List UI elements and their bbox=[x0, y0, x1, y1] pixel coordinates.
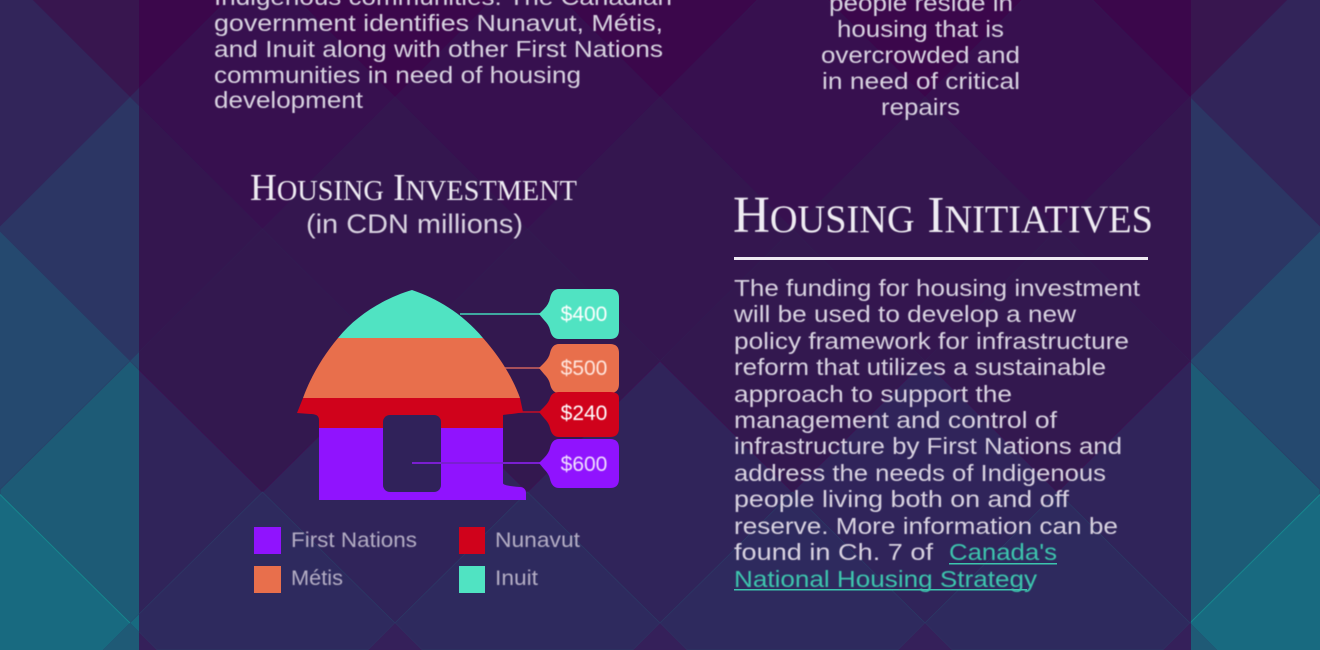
house: Métis roof band bbox=[303, 338, 520, 398]
house: Nunavut roof band bbox=[297, 398, 523, 428]
link: Canada's National Housing Strategy: Canada's bbox=[949, 539, 1057, 565]
tag: Nunavut $240 bbox=[539, 392, 619, 437]
text block: Housing Initiatives description: reserve. More information can be bbox=[734, 513, 1118, 539]
text block: overcrowded housing statistic: housing that is bbox=[837, 16, 1004, 42]
heading: Housing Investment: HOUSING INVESTMENT bbox=[250, 167, 577, 209]
text block: Indigenous housing need: communities in need of housing bbox=[214, 62, 581, 88]
tag: Inuit $400: $400 bbox=[561, 303, 607, 326]
tag: Métis $500 bbox=[539, 344, 619, 393]
house: Inuit roof band bbox=[338, 290, 483, 338]
text block: overcrowded housing statistic: overcrowded and bbox=[821, 42, 1020, 68]
text block: Indigenous housing need bbox=[214, 0, 672, 113]
house: First Nations walls bbox=[319, 428, 526, 500]
tag: Inuit $400 bbox=[539, 289, 619, 339]
text block: Housing Initiatives description: policy framework for infrastructure bbox=[734, 328, 1129, 354]
link: Canada's National Housing Strategy bbox=[734, 539, 1057, 592]
heading: Housing Investment: (in CDN millions) bbox=[306, 209, 523, 239]
tag: First Nations $600 bbox=[539, 439, 619, 488]
text block: Housing Initiatives description bbox=[733, 275, 1141, 592]
legend item: Nunavut bbox=[459, 527, 580, 554]
legend bbox=[254, 527, 580, 593]
text block: Housing Initiatives description: found in Ch. 7 of bbox=[734, 539, 934, 565]
house door bbox=[383, 415, 441, 492]
chart: house-shaped investment breakdown bbox=[297, 289, 619, 500]
text block: Housing Initiatives description: will be used to develop a new bbox=[733, 301, 1076, 327]
tag: Métis $500: $500 bbox=[561, 357, 607, 380]
text block: Housing Initiatives description: address the needs of Indigenous bbox=[734, 460, 1106, 486]
legend item: Inuit: Inuit bbox=[495, 567, 538, 590]
connector: Métis bbox=[505, 367, 542, 369]
text block: Housing Initiatives description: infrastructure by First Nations and bbox=[734, 433, 1122, 459]
connector: First Nations bbox=[412, 462, 542, 464]
legend item: Nunavut: Nunavut bbox=[495, 529, 580, 552]
heading: Housing Initiatives: HOUSING INITIATIVES bbox=[733, 187, 1153, 244]
text block: Housing Initiatives description: reform that utilizes a sustainable bbox=[734, 354, 1106, 380]
text block: Indigenous housing need: development bbox=[214, 87, 364, 113]
legend item: Métis bbox=[254, 566, 343, 593]
text block: overcrowded housing statistic bbox=[821, 0, 1020, 120]
text block: Indigenous housing need: government identifies Nunavut, Métis, bbox=[214, 10, 663, 36]
legend item: Métis: Métis bbox=[291, 567, 343, 590]
text block: Housing Initiatives description: The funding for housing investment bbox=[734, 275, 1141, 301]
text block: overcrowded housing statistic: repairs bbox=[881, 94, 960, 120]
text block: Housing Initiatives description: people living both on and off bbox=[734, 486, 1070, 512]
legend item: First Nations bbox=[254, 527, 417, 554]
text block: Indigenous housing need: and Inuit along with other First Nations bbox=[214, 36, 663, 62]
link: Canada's National Housing Strategy: National Housing Strategy bbox=[734, 566, 1038, 592]
text block: Housing Initiatives description: approach to support the bbox=[734, 381, 1012, 407]
tag: Nunavut $240: $240 bbox=[561, 402, 607, 425]
legend item: Inuit bbox=[459, 566, 538, 593]
legend item: First Nations: First Nations bbox=[291, 529, 417, 552]
connector: Inuit bbox=[460, 313, 542, 315]
text block: Housing Initiatives description: management and control of bbox=[734, 407, 1058, 433]
tag: First Nations $600: $600 bbox=[561, 453, 607, 476]
connector: Nunavut bbox=[518, 411, 542, 413]
text block: overcrowded housing statistic: in need of critical bbox=[822, 68, 1020, 94]
heading: Housing Investment bbox=[250, 167, 577, 239]
